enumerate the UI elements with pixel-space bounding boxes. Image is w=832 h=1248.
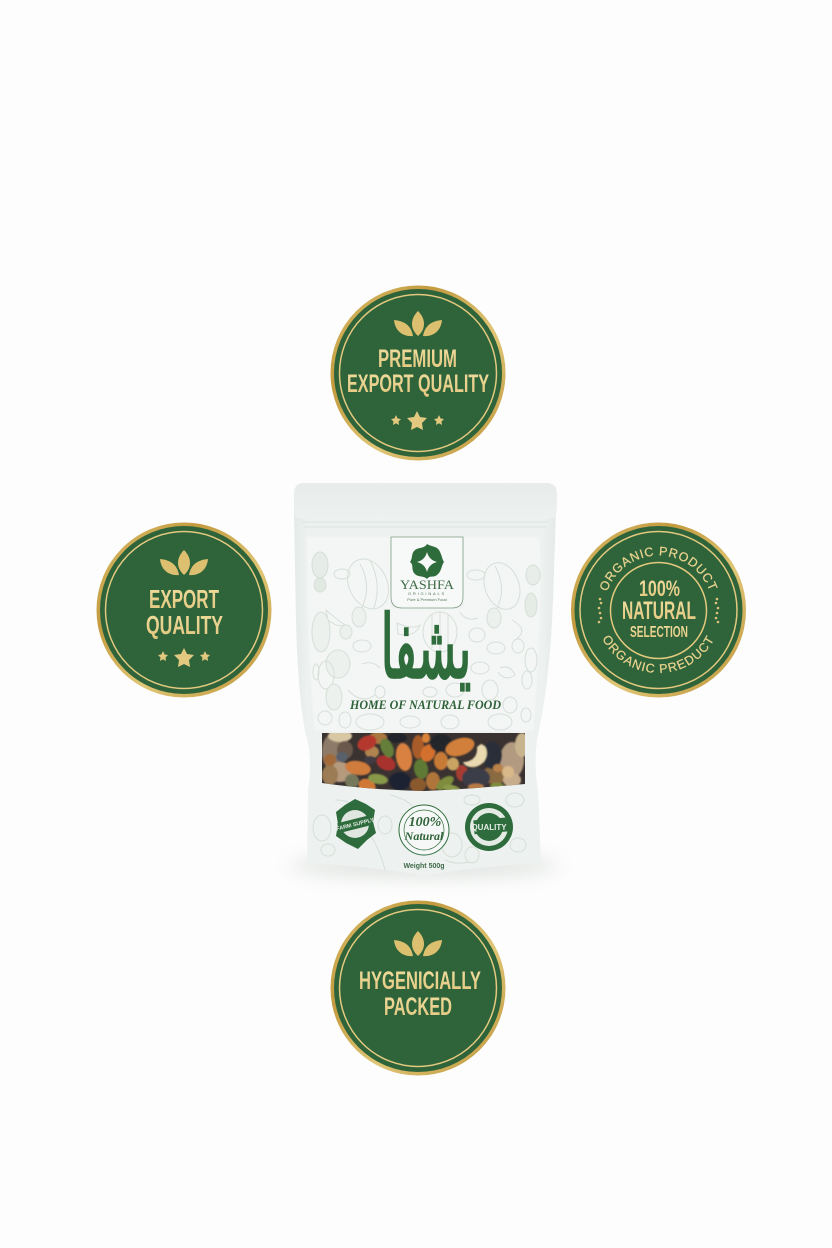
curved text top: ORGANIC PRODUCT [600,546,718,590]
badge: hygenically packed [330,900,506,1076]
brand label: Pure & Premium Food [407,597,447,602]
center text: 100% [639,576,680,601]
stamp: quality [465,803,513,851]
tagline: HOME OF NATURAL FOOD [349,698,501,712]
icon: side ornaments [598,598,719,623]
product pouch [289,483,559,878]
heading text: EXPORT [149,584,219,614]
badge: 100% natural selection [571,522,746,698]
stamp: farm quality [336,799,376,849]
badge: 100% natural selection: NATURAL [622,597,696,625]
icon: leaves [160,550,208,575]
pouch shadow [289,854,559,878]
stamp: quality: QUALITY [471,823,507,832]
brand name: YASHFA [400,577,455,592]
icon: logo [410,544,444,579]
arabic brand title: يشفا [381,598,471,699]
icon: leaves [394,311,442,336]
icon: stars [391,411,444,430]
curved text bottom: ORGANIC PREDUCT [604,635,713,674]
brand label: ORIGINALS [408,591,446,596]
badge: export quality: QUALITY [146,610,223,640]
badge: hygenically packed: PACKED [384,993,452,1021]
badge: 100% natural selection: SELECTION [630,624,688,641]
stamp: 100% natural [399,805,449,855]
zip lines [302,522,548,527]
window with mixed nuts [322,733,525,791]
pouch top seal [294,483,557,518]
badge: premium export quality [330,286,506,460]
badge: premium export quality: EXPORT QUALITY [347,370,489,398]
heading text: PREMIUM [378,345,457,373]
icon: stars [158,648,210,667]
stamp: 100% natural: 100% [409,815,441,830]
brand label [391,537,463,608]
heading text: HYGENICIALLY [359,967,481,995]
printed panel [307,537,540,731]
badge: export quality [96,522,272,698]
stamp: farm quality: FARM SUPPLY [336,817,375,833]
icon: leaves [394,931,442,956]
nut pattern [312,552,540,870]
weight label: Weight 500g [403,863,445,870]
pouch body [294,510,556,876]
stamp: 100% natural: Natural [404,829,444,843]
